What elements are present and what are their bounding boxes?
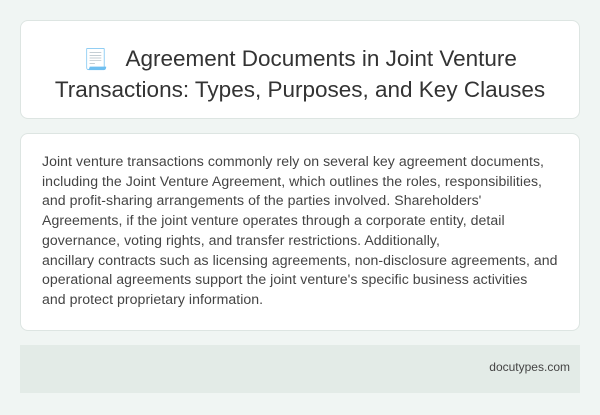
description text: ancillary contracts such as licensing agreements, non-disclosure agreements, and bbox=[42, 252, 558, 268]
description text: and protect proprietary information. bbox=[42, 291, 263, 307]
description text: Joint venture transactions commonly rely on several key agreement documents, bbox=[42, 153, 544, 169]
description text: Agreements, if the joint venture operates through a corporate entity, detail bbox=[42, 212, 505, 228]
description text bbox=[42, 153, 558, 307]
description text: and profit-sharing arrangements of the parties involved. Shareholders' bbox=[42, 192, 481, 208]
description text: operational agreements support the joint venture's specific business activities bbox=[42, 271, 527, 287]
footer: docutypes.com bbox=[489, 360, 570, 374]
title: Transactions: Types, Purposes, and Key Clauses bbox=[55, 77, 545, 102]
title: 📃 Agreement Documents in Joint Venture bbox=[83, 46, 517, 71]
description text: including the Joint Venture Agreement, which outlines the roles, responsibilities, bbox=[42, 173, 542, 189]
description panel bbox=[20, 133, 580, 331]
title panel bbox=[20, 20, 580, 119]
footer bbox=[20, 345, 580, 393]
title bbox=[55, 46, 545, 102]
description text: governance, voting rights, and transfer restrictions. Additionally, bbox=[42, 232, 440, 248]
